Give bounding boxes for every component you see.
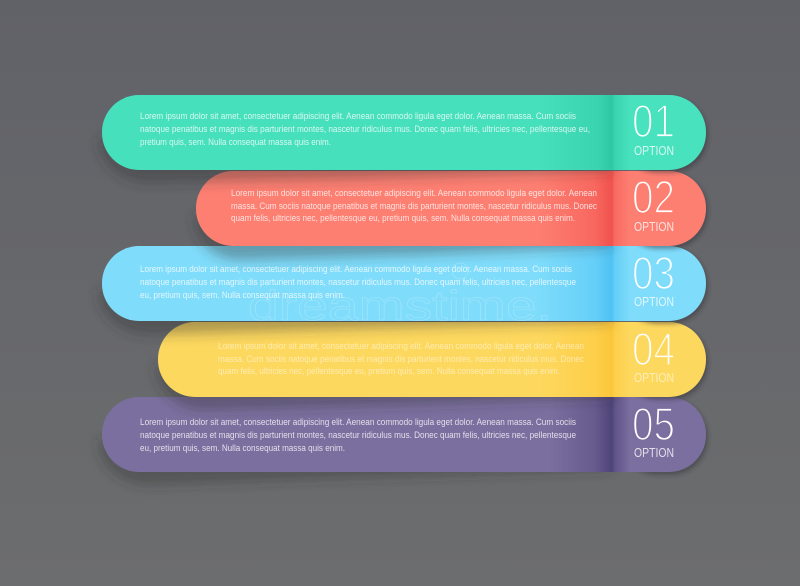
label OPTION: OPTION: [634, 144, 674, 158]
label OPTION: OPTION: [634, 220, 674, 234]
bar shape: [102, 246, 706, 321]
text block: eu, pretium quis, sem. Nulla consequat massa quis enim.: [140, 443, 345, 454]
text block: [218, 341, 584, 377]
text block: Lorem ipsum dolor sit amet, consectetuer adipiscing elit. Aenean commodo ligula eget dolor. Aenean massa. Cum sociis: [140, 264, 572, 275]
text block: pretium quis, sem. Nulla consequat massa quis enim.: [140, 137, 331, 148]
text block: massa. Cum sociis natoque penatibus et magnis dis parturient montes, nascetur ridiculus mus. Donec: [218, 354, 584, 365]
text block: Lorem ipsum dolor sit amet, consectetuer adipiscing elit. Aenean commodo ligula eget dolor. Aenean: [218, 341, 584, 352]
panel: option 01: [98, 95, 708, 183]
number 01: 01: [632, 95, 675, 147]
number 04: 04: [632, 323, 675, 375]
text block: [140, 264, 576, 301]
bar shape: [102, 95, 706, 170]
panel: option 04: [155, 322, 708, 410]
text block: natoque penatibus et magnis dis parturient montes, nascetur ridiculus mus. Donec quam felis, ultricies nec, pellentesque: [140, 430, 576, 441]
text block: [140, 111, 590, 148]
label OPTION: OPTION: [634, 295, 674, 309]
panel: option 05: [98, 397, 708, 485]
panel: option 02: [193, 171, 708, 260]
number 03: 03: [632, 247, 675, 299]
label OPTION: OPTION: [634, 371, 674, 385]
label OPTION: OPTION: [634, 446, 674, 460]
text block: eu, pretium quis, sem. Nulla consequat massa quis enim.: [140, 290, 345, 301]
text block: Lorem ipsum dolor sit amet, consectetuer adipiscing elit. Aenean commodo ligula eget dolor. Aenean: [231, 188, 597, 199]
text block: Lorem ipsum dolor sit amet, consectetuer adipiscing elit. Aenean commodo ligula eget dolor. Aenean massa. Cum sociis: [140, 111, 576, 122]
text block: [140, 417, 576, 454]
panel: option 03: [98, 246, 708, 335]
number 05: 05: [632, 398, 675, 450]
text block: natoque penatibus et magnis dis parturient montes, nascetur ridiculus mus. Donec quam felis, ultricies nec, pellentesque: [140, 277, 576, 288]
text block: [231, 188, 597, 224]
text block: quam felis, ultricies nec, pellentesque eu, pretium quis, sem. Nulla consequat massa quis enim.: [218, 366, 560, 377]
text block: massa. Cum sociis natoque penatibus et magnis dis parturient montes, nascetur ridiculus mus. Donec: [231, 201, 597, 212]
bar shape: [158, 322, 706, 397]
bar shape: [196, 171, 706, 246]
text block: Lorem ipsum dolor sit amet, consectetuer adipiscing elit. Aenean commodo ligula eget dolor. Aenean massa. Cum sociis: [140, 417, 576, 428]
bar shape: [102, 397, 706, 472]
number 02: 02: [632, 171, 675, 223]
watermark: dreamstime.: [248, 282, 552, 329]
text block: natoque penatibus et magnis dis parturient montes, nascetur ridiculus mus. Donec quam felis, ultricies nec, pellentesque eu,: [140, 124, 590, 135]
watermark: [248, 263, 552, 329]
text block: quam felis, ultricies nec, pellentesque eu, pretium quis, sem. Nulla consequat massa quis enim.: [231, 213, 575, 224]
